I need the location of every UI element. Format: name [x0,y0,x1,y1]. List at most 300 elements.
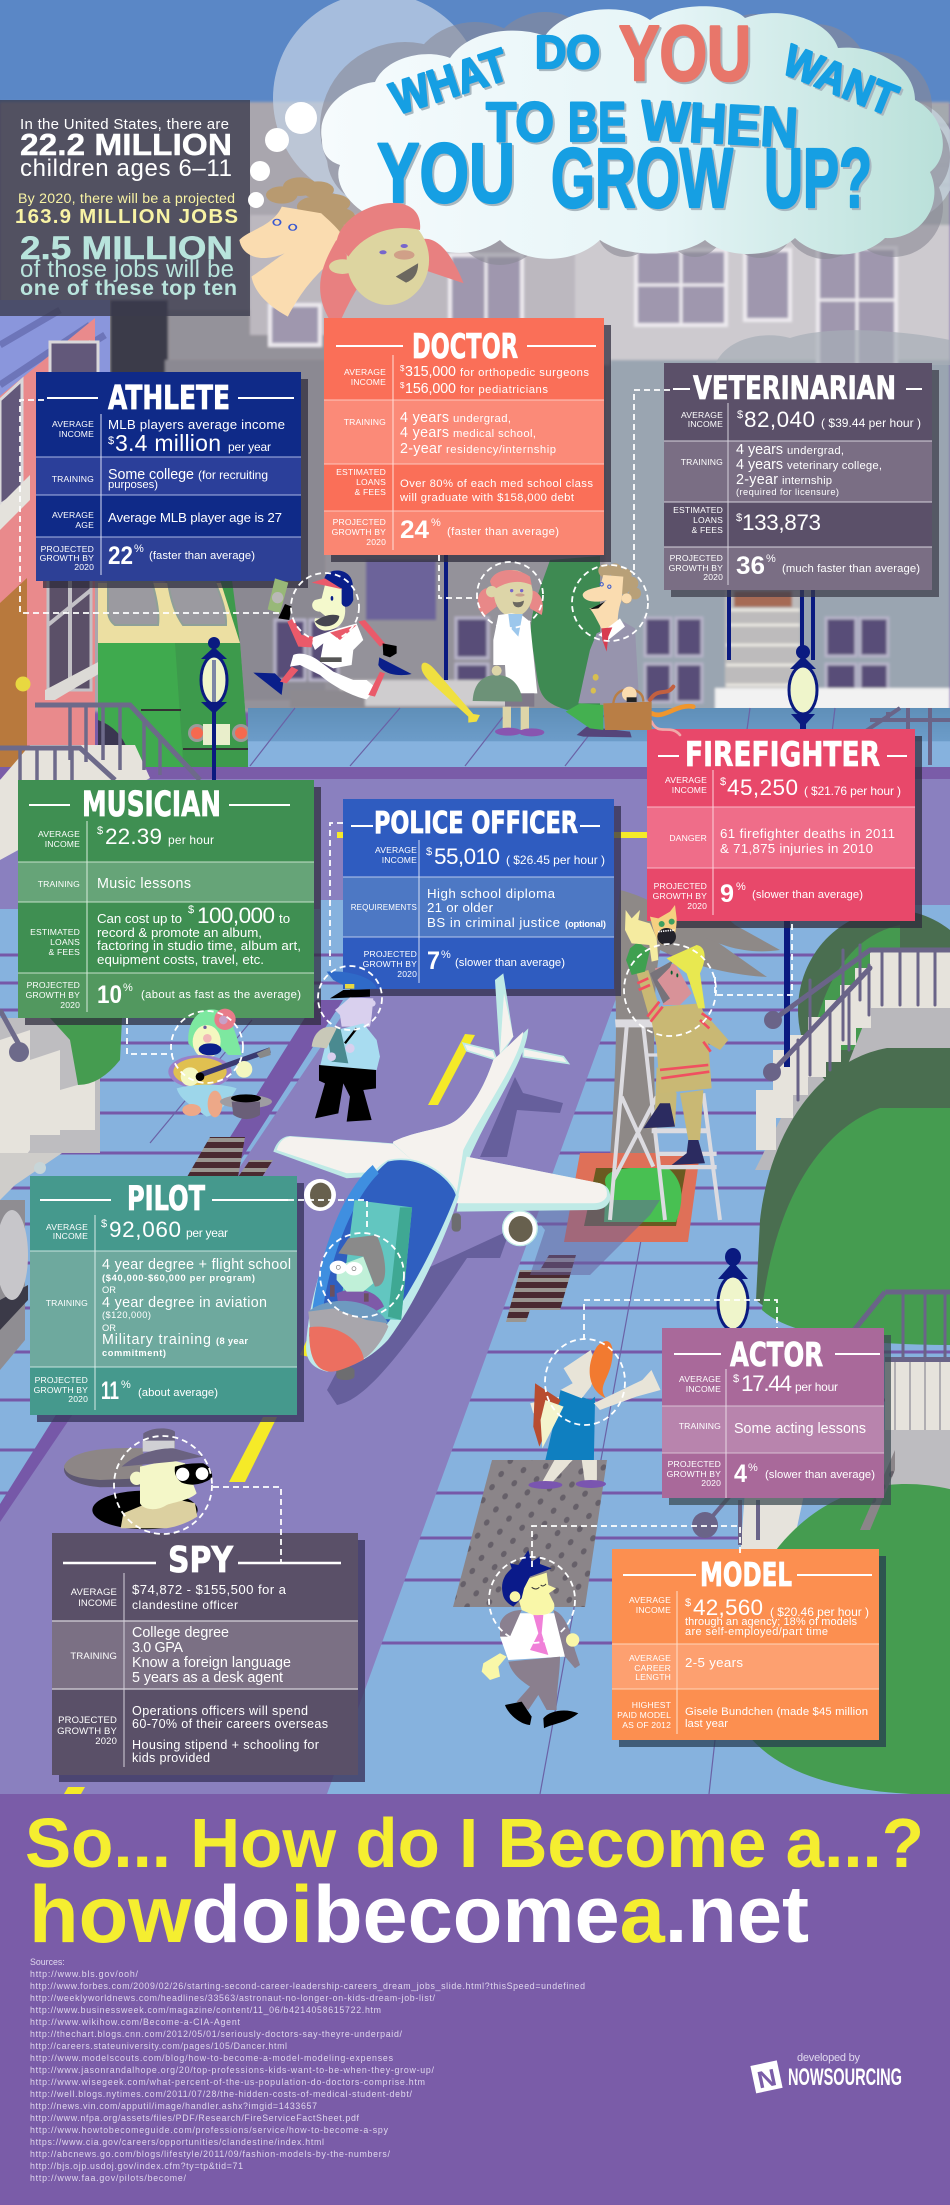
row: training: 2-year [736,472,778,488]
panel: police officer [343,799,621,996]
row: loans and fees: $ [188,904,194,916]
row: projected growth: GROWTH BY [57,1726,118,1737]
row: projected growth: 2020 [74,562,94,572]
text: sources: http://well.blogs.nytimes.com/2011/07/28/the-hidden-costs-of-medical-student-debt/ [30,2089,413,2099]
row: training: purposes) [108,479,158,491]
row: projected growth: 36 [736,552,765,580]
heading: pilot: PILOT [127,1179,206,1219]
icon: girl head [320,203,464,330]
row: training: TRAINING [52,474,94,484]
row: average income: 315,000 [405,364,456,380]
row: average income: ( $26.45 per hour ) [506,853,605,867]
row: average age [52,510,282,530]
stair rail by firefighter sign [860,708,950,765]
row: projected growth: GROWTH BY [34,1385,88,1395]
row: loans and fees: will graduate with $158,000 debt [399,492,575,504]
row: training: 5 years as a desk agent [132,1670,283,1686]
row: projected growth: (slower than average) [752,889,863,901]
row: projected growth: % [123,982,133,994]
row: highest paid: HIGHEST [632,1700,672,1710]
row: training: Some college [108,467,194,483]
row: average income: $ [426,846,432,858]
row: projected growth: Housing stipend + schooling for [132,1738,319,1752]
row: projected growth: % [748,1462,758,1474]
panel: footer [0,1794,950,2205]
background: paving stripes [0,955,950,1643]
title: what do you want: WANT [776,36,904,126]
text: sources: http://careers.stateuniversity.com/pages/105/Dancer.html [30,2041,287,2051]
row: projected growth: (much faster than average) [782,563,920,575]
row: projected growth: PROJECTED [41,544,94,554]
stat: top ten: one of these top ten [20,276,237,300]
row: projected growth: PROJECTED [654,881,707,891]
row: training: commitment) [102,1348,166,1358]
heading: athlete: ATHLETE [108,378,230,417]
row: projected growth: 2020 [366,537,386,547]
row: average income: INCOME [59,429,94,439]
background: road markings [64,832,648,1794]
character: police officer [312,971,380,1122]
row: projected growth: PROJECTED [35,1375,88,1385]
text: sources: http://news.vin.com/apputil/image/handler.ashx?imgid=1433657 [30,2101,317,2111]
row: training: undergrad, [453,413,511,425]
background: left stairs [0,705,200,1370]
row: projected growth: GROWTH BY [40,553,94,563]
stat: children: children ages 6–11 [20,155,232,182]
row: average income: 82,040 [744,407,815,432]
row: projected growth: PROJECTED [364,949,417,959]
background: buildings [0,102,950,712]
title: what do you want: WHEN [639,88,799,159]
row: average income: INCOME [45,839,80,849]
row: loans and fees: record & promote an album, [97,925,262,940]
row: training [344,410,556,457]
background: blue paving [0,880,950,1795]
background: sky [0,0,950,104]
row: loans and fees: & FEES [355,487,386,497]
text: sources: http://abcnews.go.com/blogs/lifestyle/2011/09/fashion-models-by-the-numbers/ [30,2149,391,2159]
airplane shadow [327,1077,660,1405]
row: danger: & 71,875 injuries in 2010 [720,841,873,856]
text: sources: http://www.faa.gov/pilots/become/ [30,2173,187,2183]
title: what do you want: UP? [764,131,872,225]
row: training: ($40,000-$60,000 per program) [102,1273,255,1283]
row: average income: $ [108,435,114,447]
stat: jobs: By 2020, there will be a projected [18,191,235,207]
row: training: OR [102,1323,116,1333]
row: average income: 17.44 [741,1371,792,1396]
row: average income: AVERAGE [679,1374,721,1384]
row: projected growth: % [441,949,451,961]
row: projected growth: 10 [97,981,122,1009]
row: loans and fees [30,903,301,967]
row: average income: $ [720,776,726,788]
row: average income: clandestine officer [132,1598,238,1612]
row: average income [52,417,285,456]
row: loans and fees [336,467,593,504]
row: requirements: (optional) [565,919,606,929]
row: average income: 92,060 [109,1217,181,1242]
row: average age: AGE [75,520,94,530]
row: average income: $ [733,1373,739,1385]
character: musician [168,1009,272,1119]
row: loans and fees: $ [736,512,742,524]
row: projected growth: 7 [427,947,440,975]
row: projected growth [40,542,255,572]
lamp posts [201,555,817,1330]
row: projected growth: 22 [108,542,133,570]
row: average income [679,1371,838,1396]
logo: nowsourcing: N [755,2064,779,2095]
stat: children: 22.2 MILLION [20,127,232,162]
row: requirements: BS in criminal justice [427,915,560,930]
row: average income: INCOME [78,1598,117,1609]
text: sources: https://www.cia.gov/careers/opportunities/clandestine/index.html [30,2137,324,2147]
row: average income: are self-employed/part time [685,1626,828,1638]
row: training: TRAINING [46,1298,88,1308]
row: average income [629,1595,869,1638]
row: average income: INCOME [351,377,386,387]
row: loans and fees: ESTIMATED [30,927,80,937]
row: average income [665,775,901,800]
row: projected growth [34,1375,218,1405]
logo: nowsourcing: developed by [797,2052,860,2064]
row: highest paid: Gisele Bundchen (made $45 million [685,1706,868,1718]
airplane nose and cockpit [306,1158,459,1380]
row: average income: INCOME [53,1231,88,1241]
row: loans and fees: equipment costs, travel, etc. [97,952,264,967]
row: training: 4 years [400,410,449,426]
row: requirements: REQUIREMENTS [351,903,417,912]
row: projected growth: (faster than average) [149,550,255,562]
panel: pilot [30,1176,304,1422]
heading: so how do i become a: So... How do I Become a...? [25,1804,924,1882]
row: loans and fees: ESTIMATED [673,505,723,515]
row: projected growth: (slower than average) [765,1469,875,1481]
row: average income: for pediatricians [460,384,548,396]
row: training [52,467,268,491]
row: average income: 156,000 [405,381,456,397]
row: training: (for recruiting [198,468,268,482]
row: training [38,876,191,892]
row: average income: per hour [795,1380,838,1394]
row: average income: per hour [168,833,214,847]
row: training: 4 years [400,425,449,441]
row: training [46,1257,291,1358]
row: career length [629,1653,743,1682]
row: loans and fees: 133,873 [742,510,821,535]
row: average income: INCOME [672,785,707,795]
row: loans and fees: LOANS [356,477,386,487]
row: average income: 3.4 million [115,430,221,456]
panel: veterinarian [664,363,939,597]
text: sources: http://www.howtobecomeguide.com/professions/service/how-to-become-a-spy [30,2125,389,2135]
row: loans and fees: 100,000 [197,903,275,928]
character: actor [528,1341,661,1489]
panel: model [612,1549,886,1747]
row: training: TRAINING [344,417,386,427]
row: projected growth [57,1704,328,1765]
row: projected growth: PROJECTED [333,517,386,527]
row: highest paid: AS OF 2012 [622,1720,671,1730]
panel: athlete [36,372,308,588]
row: average income: 42,560 [693,1595,763,1620]
logo: nowsourcing [750,2052,902,2095]
row: loans and fees: LOANS [693,515,723,525]
title: what do you want: BE [568,90,626,153]
character: spy [64,1428,212,1529]
stat: jobs [15,191,238,228]
row: projected growth: PROJECTED [27,980,80,990]
stat: jobs: 163.9 MILLION JOBS [15,205,238,228]
row: projected growth: (about average) [138,1387,218,1399]
row: projected growth: Operations officers will spend [132,1704,308,1718]
row: requirements [351,886,606,930]
row: projected growth: 11 [101,1377,119,1405]
heading: website address: howdoibecomea.net [29,1870,809,1960]
title cloud [320,6,950,265]
background: tree and planter [564,890,780,1242]
stat: top ten: of those jobs will be [20,256,234,283]
row: average income: AVERAGE [38,829,80,839]
text: sources [30,1957,585,2183]
row: training: OR [102,1285,116,1295]
character: athlete [253,571,480,723]
row: average income: for orthopedic surgeons [460,367,589,379]
background: sidewalk [248,708,950,768]
row: projected growth: 9 [720,880,734,908]
title: what do you want: YOU [619,9,751,97]
row: training: College degree [132,1625,229,1641]
row: career length: LENGTH [635,1672,671,1682]
title: what do you want: DO [535,26,600,78]
row: average income: ( $39.44 per hour ) [821,416,921,430]
heading: model: MODEL [700,1555,792,1594]
title: what do you want: WHAT [384,38,514,125]
row: projected growth: 2020 [687,901,707,911]
row: loans and fees: Over 80% of each med school class [400,478,593,490]
row: average income: $ [737,409,743,421]
row: training: residency/internship [446,444,556,456]
row: projected growth [669,552,920,582]
panel: spy [52,1533,365,1782]
row: average income: 22.39 [105,824,162,849]
row: projected growth: % [431,517,441,529]
row: projected growth: % [736,881,746,893]
row: projected growth [653,880,863,911]
row: projected growth: 2020 [703,572,723,582]
stat: top ten [20,230,237,300]
row: training: 3.0 GPA [132,1640,183,1656]
heads: boy and girl dreaming [239,177,464,330]
character: firefighter and cat [610,905,728,1220]
airplane [273,973,610,1246]
row: average income: INCOME [636,1605,671,1615]
row: projected growth: GROWTH BY [26,990,80,1000]
row: projected growth: % [134,543,144,555]
row: average income: AVERAGE [629,1595,671,1605]
thought bubbles [248,102,317,208]
row: loans and fees: LOANS [50,937,80,947]
row: average income: 55,010 [434,844,500,869]
background: right stairs and hills [692,910,950,1795]
row: average income: AVERAGE [665,775,707,785]
row: average income: $ [685,1597,691,1609]
character: doctor [473,570,544,736]
row: projected growth: 60-70% of their careers overseas [132,1717,328,1731]
row: average income: $ [400,381,405,390]
row: loans and fees: & FEES [692,525,723,535]
row: average income: ( $21.76 per hour ) [804,784,901,798]
row: loans and fees: & FEES [49,947,80,957]
row: training: 4 years [736,457,783,473]
row: average income: $ [101,1218,107,1230]
text: sources: http://www.modelscouts.com/blog/how-to-become-a-model-modeling-expenses [30,2053,394,2063]
row: training: TRAINING [681,457,723,467]
row: projected growth: GROWTH BY [332,527,386,537]
row: loans and fees: Can cost up to [97,911,182,926]
title: what do you want: GROW [551,131,733,225]
row: training [70,1625,291,1686]
row: average income: ( $20.46 per hour ) [770,1605,869,1619]
row: average income: AVERAGE [52,419,94,429]
row: projected growth: kids provided [132,1751,210,1765]
row: average income: INCOME [688,419,723,429]
panel: stats intro [0,100,317,316]
row: average income: per year [186,1226,228,1240]
text: sources: http://www.bls.gov/ooh/ [30,1969,139,1979]
row: average income: MLB players average income [108,417,285,432]
panel: musician [18,780,321,1025]
panel: actor [662,1328,891,1505]
text: sources: http://www.jasonrandalhope.org/20/top-professions-kids-want-to-be-when-they-grow-up/ [30,2065,435,2075]
row: average income [46,1217,228,1242]
icon: boy head [239,177,355,317]
row: projected growth: 2020 [701,1478,721,1488]
row: projected growth: GROWTH BY [363,959,417,969]
stat: children [20,116,232,182]
heading: musician: MUSICIAN [82,785,221,825]
row: training: 4 year degree + flight school [102,1257,291,1273]
row: projected growth: PROJECTED [670,553,723,563]
row: average income: 45,250 [727,775,798,800]
row: loans and fees: factoring in studio time, album art, [97,938,301,953]
background: purple-striped roofline and pink house [0,300,110,790]
row: training: Some acting lessons [734,1421,866,1437]
row: training: (8 year [216,1336,248,1346]
row: projected growth: % [766,553,776,565]
row: projected growth: GROWTH BY [667,1469,721,1479]
row: training: TRAINING [38,879,80,889]
row: projected growth: 2020 [95,1736,117,1747]
text: sources: http://thechart.blogs.cnn.com/2012/05/01/seriously-doctors-say-theyre-underpaid/ [30,2029,403,2039]
row: training: veterinary college, [787,460,882,472]
row: projected growth: 2020 [397,969,417,979]
background: tram [98,580,250,775]
row: training: ($120,000) [102,1310,151,1320]
row: training: Know a foreign language [132,1655,291,1671]
row: average age: Average MLB player age is 27 [108,510,282,525]
row: projected growth: 2020 [60,1000,80,1010]
stat: children: In the United States, there are [20,116,229,133]
row: career length: AVERAGE [629,1653,671,1663]
row: projected growth [363,947,565,979]
background: pavement grates [187,1137,895,1607]
text: sources: http://www.wisegeek.com/what-percent-of-the-us-population-do-doctors-comprise.htm [30,2077,425,2087]
text: sources: Sources: [30,1957,65,1967]
row: average income [38,824,214,849]
row: projected growth: % [121,1379,131,1391]
row: average income: $ [400,364,405,373]
background: pale clouds [273,0,950,365]
panel: firefighter [647,729,922,928]
row: loans and fees: to [279,911,290,926]
row: average income: through an agency; 18% of models [685,1616,858,1628]
text: sources: http://bjs.ojp.usdoj.gov/index.cfm?ty=tp&tid=71 [30,2161,243,2171]
row: requirements: High school diploma [427,886,556,901]
connector dashes [20,390,792,1643]
row: average income [344,364,589,397]
row: training: 4 year degree in aviation [102,1295,267,1311]
row: average income [681,407,921,432]
row: career length: 2-5 years [685,1655,743,1670]
row: training: medical school, [453,428,536,440]
character: pilot [308,1235,388,1372]
row: training: 4 years [736,442,783,458]
background: dark green bush [531,556,600,710]
row: training: TRAINING [70,1651,117,1662]
character: model [482,1550,580,1728]
heading: police officer: POLICE OFFICER [374,806,578,841]
row: average income: $74,872 - $155,500 for a [132,1582,287,1597]
row: average income: INCOME [686,1384,721,1394]
row: danger: DANGER [669,833,707,843]
row: average income: AVERAGE [46,1222,88,1232]
row: projected growth [332,516,559,547]
row: average income: AVERAGE [71,1587,117,1598]
character: veterinarian [566,563,693,737]
row: average income: AVERAGE [681,410,723,420]
row: projected growth [26,980,301,1010]
row: average income [375,844,605,869]
text: sources: http://www.businessweek.com/magazine/content/11_06/b4214058615722.htm [30,2005,381,2015]
row: projected growth [667,1459,875,1488]
row: projected growth: (faster than average) [447,526,559,538]
row: danger [669,826,895,856]
row: danger: 61 firefighter deaths in 2011 [720,826,895,841]
row: highest paid: PAID MODEL [617,1710,671,1720]
stat: top ten: 2.5 MILLION [20,230,233,266]
row: average income: $ [97,825,103,837]
heading: firefighter: FIREFIGHTER [685,735,880,775]
row: average income: per year [228,440,271,454]
row: average income: INCOME [382,855,417,865]
row: projected growth: (about as fast as the average) [141,989,301,1001]
row: training: Military training [102,1332,211,1348]
row: training [681,442,882,497]
row: training: undergrad, [787,445,844,457]
row: loans and fees [673,505,821,535]
row: projected growth: (slower than average) [455,957,565,969]
row: training: (required for licensure) [736,487,839,497]
heading: doctor: DOCTOR [412,327,518,367]
title: what do you want [377,9,904,225]
row: average income: AVERAGE [375,845,417,855]
text: sources: http://www.forbes.com/2009/02/26/starting-second-career-leadership-careers_dream_jobs_slide.html?thisSpeed=undefined [30,1981,585,1991]
row: projected growth: 24 [400,516,429,544]
text: sources: http://www.wikihow.com/Become-a-CIA-Agent [30,2017,241,2027]
row: average income [71,1582,287,1612]
